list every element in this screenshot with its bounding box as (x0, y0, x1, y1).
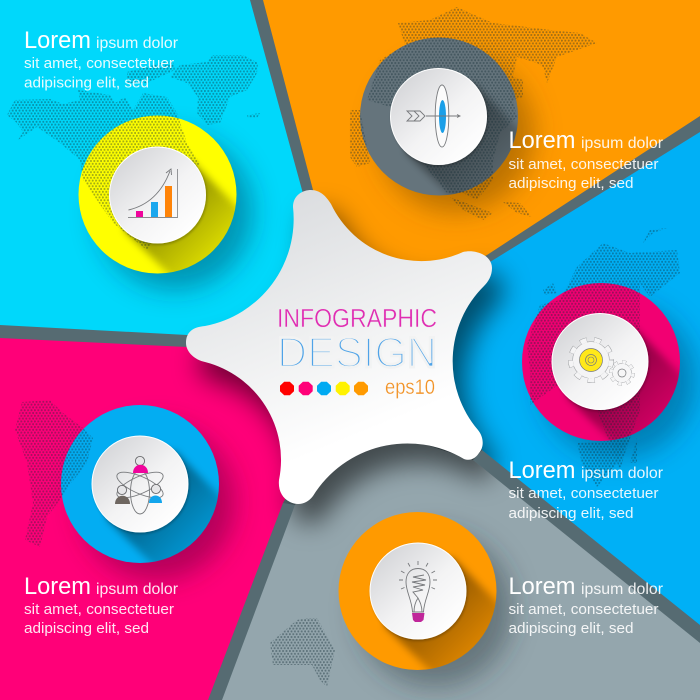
text block: right: sit amet, consectetuer (508, 485, 658, 502)
text block: top right (508, 127, 664, 192)
text block: bottom left: sit amet, consectetuer (24, 601, 174, 618)
text block: bottom right: sit amet, consectetuer (508, 601, 658, 618)
text block: top right: sit amet, consectetuer (508, 156, 658, 173)
panel: orange (263, 0, 700, 300)
text block: bottom right (508, 573, 664, 637)
circle: orange bulb (270, 512, 514, 687)
circle: blue people (15, 400, 236, 580)
dotted map: cyan panel (7, 55, 260, 250)
disc (370, 543, 466, 639)
icon: bar chart (128, 169, 178, 218)
text block: bottom left (24, 573, 179, 637)
central star panel (186, 190, 492, 504)
disc (110, 147, 206, 243)
text block: bottom right: Lorem (508, 573, 576, 600)
text block: top left: sit amet, consectetuer (24, 55, 174, 72)
text block: top left: ipsum dolor (96, 35, 179, 52)
text block: bottom right: adipiscing elit, sed (508, 620, 634, 637)
title: infographic: INFOGRAPHIC (277, 303, 437, 333)
text block: top left: adipiscing elit, sed (24, 74, 149, 92)
panel: gray (222, 420, 700, 700)
disc (390, 68, 486, 164)
dotted map: gray panel (270, 618, 335, 687)
icon: people and orbits (114, 456, 166, 514)
panel: cyan (0, 0, 340, 340)
text block: bottom left: ipsum dolor (96, 581, 179, 598)
text block: right (508, 457, 664, 522)
disc (552, 314, 648, 410)
text block: right: ipsum dolor (581, 465, 664, 482)
text block: top right: Lorem (508, 127, 576, 154)
colour hexagon dots (280, 382, 368, 395)
text block: top right: adipiscing elit, sed (508, 175, 634, 192)
text block: bottom left: adipiscing elit, sed (24, 620, 149, 637)
dotted map: blue panel (527, 228, 680, 487)
text block: bottom left: Lorem (24, 573, 91, 600)
icon: light bulb (399, 561, 437, 622)
icon: arrow and target (407, 85, 460, 147)
panel: blue (400, 132, 700, 625)
disc (92, 436, 188, 532)
text block: top left (24, 27, 179, 92)
title: design: DESIGN (277, 329, 437, 377)
circle: gray target (350, 7, 597, 220)
panel: pink (0, 338, 340, 700)
text block: top right: ipsum dolor (581, 135, 664, 152)
text block: right: adipiscing elit, sed (508, 505, 634, 522)
dotted map: pink panel (15, 400, 93, 547)
circle: yellow chart (7, 55, 260, 291)
icon: gears (570, 340, 633, 384)
dotted map: orange panel (350, 7, 597, 220)
text block: right: Lorem (508, 457, 576, 484)
central star shadow (198, 210, 504, 524)
circle: pink gears (522, 228, 696, 487)
text block: top left: Lorem (24, 27, 91, 54)
label: eps10: eps10 (385, 376, 435, 399)
text block: bottom right: ipsum dolor (581, 581, 664, 598)
